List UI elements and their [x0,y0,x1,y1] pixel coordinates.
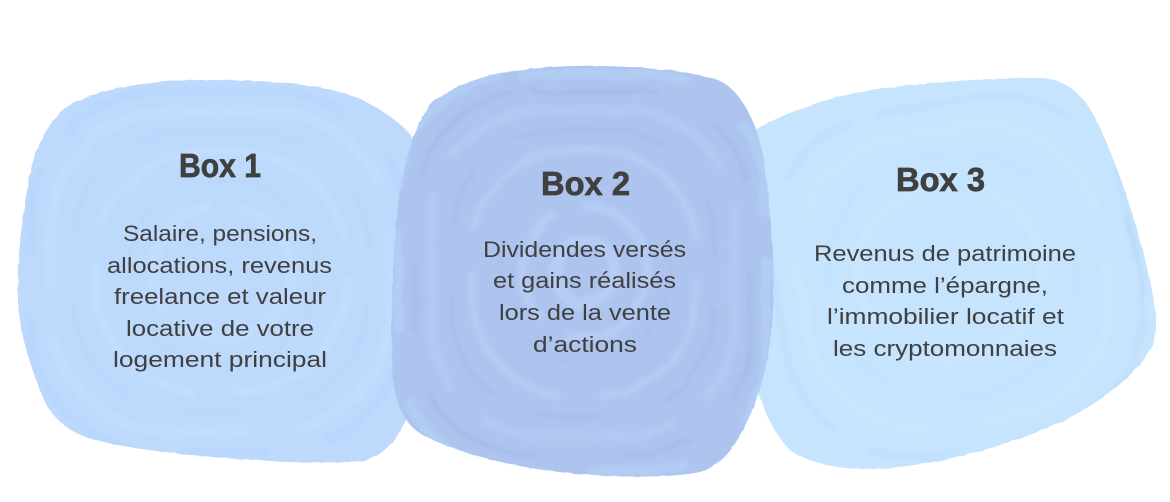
description: box 1: Salaire, pensions, [123,221,317,246]
description: box 1: locative de votre [126,316,314,341]
description: box 2: d’actions [533,332,637,357]
panel: box 3 blob [735,75,1163,478]
heading: Box 2: Box 2 [541,165,630,202]
description: box 3 [814,241,1076,361]
description: box 3: les cryptomonnaies [833,336,1057,361]
description: box 1: allocations, revenus [107,253,332,278]
description: box 2 [483,237,686,357]
description: box 3: Revenus de patrimoine [814,241,1076,266]
text: box 3 [814,161,1076,361]
description: box 2: Dividendes versés [483,237,686,262]
description: box 1: freelance et valeur [114,284,326,309]
heading: Box 1: Box 1 [179,147,261,184]
description: box 1 [107,221,332,372]
text: box 2 [483,165,686,357]
panel: box 1 blob [18,80,430,462]
description: box 2: lors de la vente [499,300,671,325]
description: box 3: l’immobilier locatif et [827,304,1064,329]
description: box 2: et gains réalisés [493,268,676,293]
description: box 1: logement principal [113,347,327,372]
description: box 3: comme l’épargne, [842,273,1048,298]
panel: box 2 blob [392,66,774,477]
text: box 1 [107,147,332,372]
heading: Box 3: Box 3 [896,161,985,198]
